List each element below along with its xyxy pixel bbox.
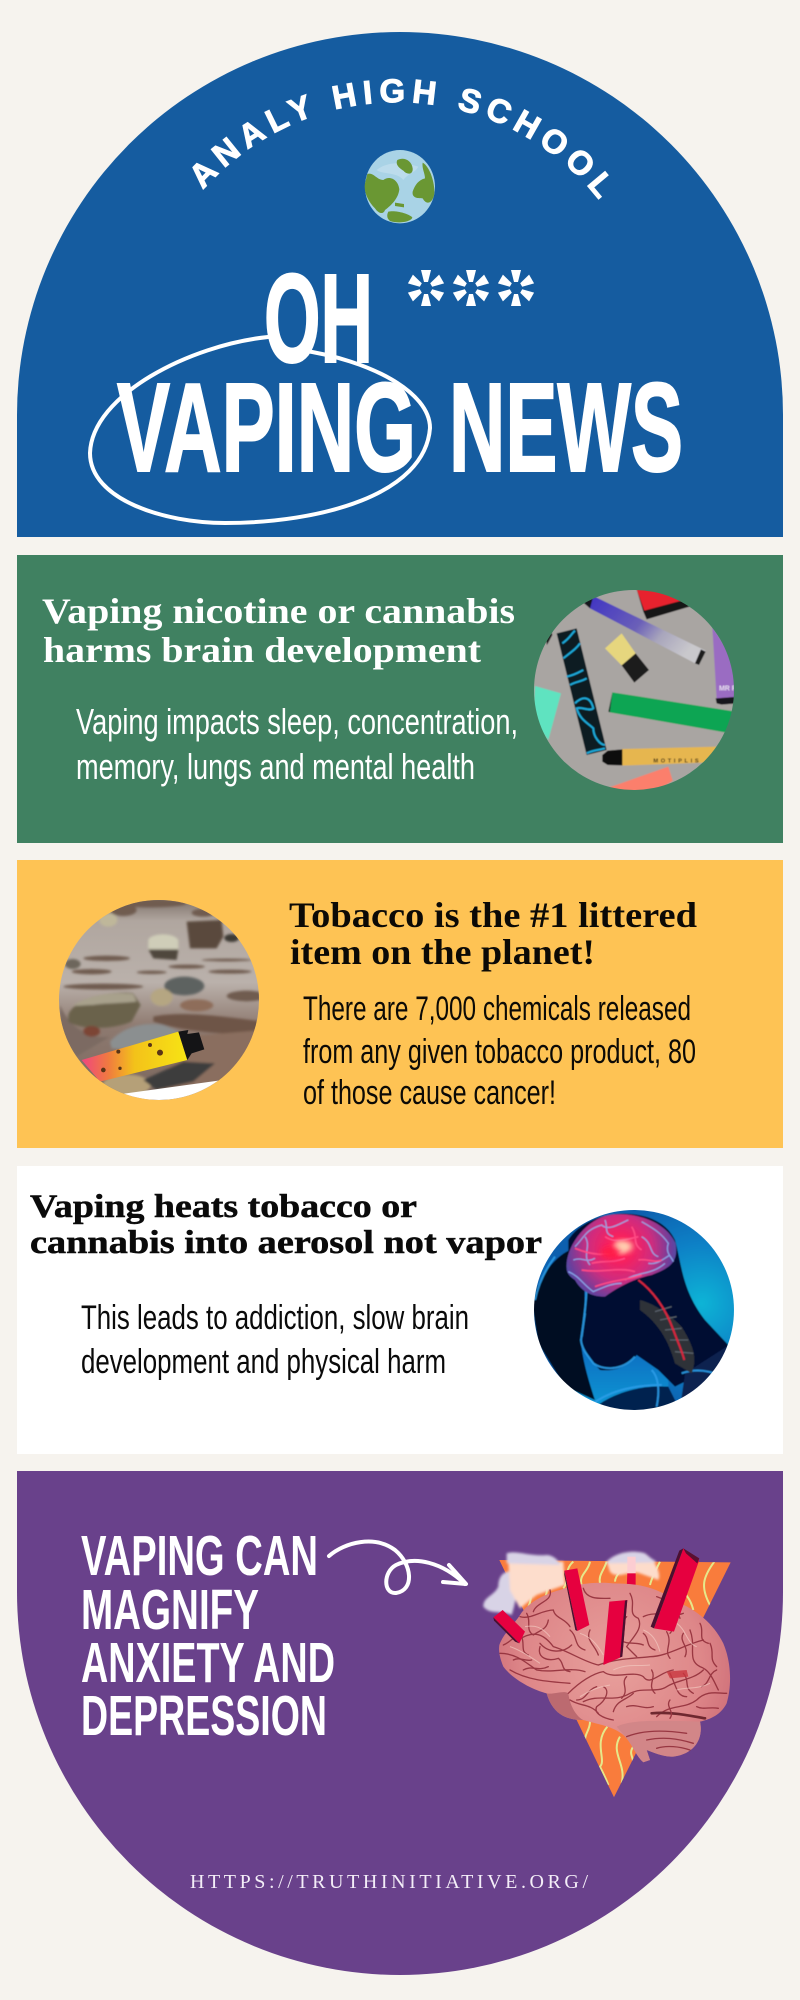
yellow body text: of those cause cancer! — [303, 1074, 556, 1112]
panel: blue header arch — [17, 32, 783, 537]
title — [117, 248, 683, 498]
panel: purple anxiety and depression — [17, 1471, 783, 1975]
title: VAPING — [117, 357, 416, 498]
yellow heading: item on the planet! — [290, 932, 595, 972]
white panel body text: This leads to addiction, slow brain — [81, 1299, 469, 1337]
decorative stars — [408, 270, 534, 306]
photo: littered vape on a rocky beach — [59, 900, 259, 1100]
purple heading: DEPRESSION — [81, 1684, 327, 1748]
panel: yellow litter — [17, 860, 783, 1148]
purple heading: ANXIETY AND — [81, 1631, 335, 1695]
white panel heading: cannabis into aerosol not vapor — [30, 1225, 542, 1261]
white panel body text — [81, 1299, 469, 1381]
yellow body text — [303, 990, 696, 1112]
white panel heading — [30, 1189, 542, 1261]
hand-drawn circle around VAPING — [90, 337, 430, 523]
green heading: Vaping nicotine or cannabis — [42, 591, 515, 631]
icon: globe — [365, 150, 435, 223]
photo: assorted vape pens — [534, 590, 734, 790]
panel: green brain development — [17, 555, 783, 843]
green body text: memory, lungs and mental health — [76, 746, 475, 787]
yellow heading: Tobacco is the #1 littered — [289, 895, 697, 935]
green body text — [76, 701, 518, 787]
curved school name: ANALY HIGH SCHOOL — [192, 78, 609, 200]
illustration: brain with vape pens on triangle — [483, 1548, 731, 1797]
yellow heading — [289, 895, 697, 972]
arrow: curly arrow to brain — [329, 1542, 466, 1593]
green body text: Vaping impacts sleep, concentration, — [76, 701, 518, 742]
purple heading — [81, 1524, 335, 1748]
purple heading: MAGNIFY — [81, 1578, 259, 1642]
green heading — [42, 591, 515, 670]
white panel heading: Vaping heats tobacco or — [30, 1189, 417, 1225]
title: OH — [264, 248, 373, 389]
white panel body text: development and physical harm — [81, 1343, 446, 1381]
purple heading: VAPING CAN — [81, 1524, 318, 1588]
panel: white aerosol — [17, 1166, 783, 1454]
green heading: harms brain development — [43, 630, 481, 670]
photo: glowing brain in a human head — [534, 1210, 734, 1410]
source url: HTTPS://TRUTHINITIATIVE.ORG/ — [190, 1871, 588, 1893]
photo: assorted vape pens: MOTIPLIS — [653, 759, 701, 765]
photo: assorted vape pens: MR FI — [719, 686, 738, 693]
